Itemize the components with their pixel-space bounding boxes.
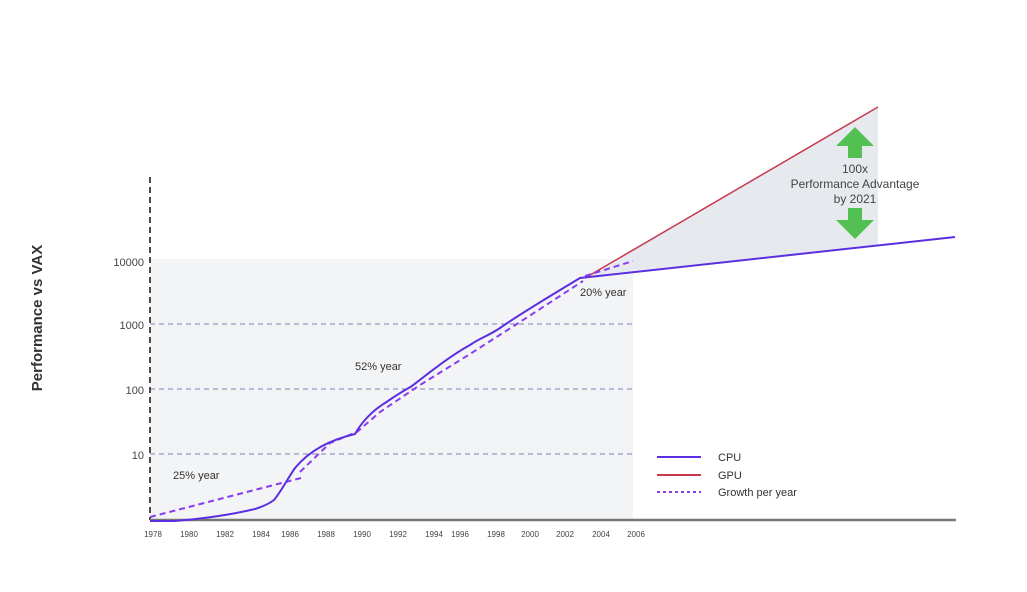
x axis labels: 1994: [425, 530, 443, 539]
annotation: 25% year: 25% year: [173, 470, 220, 482]
x axis labels: 1992: [389, 530, 407, 539]
y axis labels: 10: [132, 450, 144, 462]
x axis labels: 2002: [556, 530, 574, 539]
GPU line: [585, 107, 878, 278]
y axis labels: 100: [126, 385, 144, 397]
x axis labels: 1982: [216, 530, 234, 539]
x axis labels: [144, 530, 645, 539]
callout text: 100x: [842, 162, 868, 176]
callout text: by 2021: [834, 192, 877, 206]
y axis: [149, 177, 151, 520]
legend: CPU: [718, 452, 741, 464]
legend: Growth per year: [718, 487, 797, 499]
x axis labels: 1990: [353, 530, 371, 539]
callout text: [791, 162, 920, 206]
x axis labels: 2006: [627, 530, 645, 539]
gridlines: [150, 324, 633, 454]
growth per year dashed line: [150, 261, 633, 517]
CPU line: [150, 237, 955, 521]
callout text: Performance Advantage: [791, 177, 920, 191]
legend: GPU: [718, 470, 742, 482]
performance gap shaded area: [585, 107, 878, 278]
legend: [657, 452, 797, 499]
plot background panel: [150, 259, 633, 520]
y axis title: Performance vs VAX: [29, 245, 46, 391]
y axis labels: 10000: [113, 257, 144, 269]
icon: up arrow: [836, 127, 874, 158]
x axis labels: 1980: [180, 530, 198, 539]
icon: down arrow: [836, 208, 874, 239]
x axis labels: 1984: [252, 530, 270, 539]
x axis: [150, 519, 956, 521]
x axis labels: 1998: [487, 530, 505, 539]
x axis labels: 2000: [521, 530, 539, 539]
x axis labels: 1978: [144, 530, 162, 539]
y axis labels: 1000: [120, 320, 144, 332]
x axis labels: 1988: [317, 530, 335, 539]
annotation: 20% year: 20% year: [580, 287, 627, 299]
annotation: 52% year: 52% year: [355, 361, 402, 373]
y axis labels: [113, 257, 144, 462]
x axis labels: 2004: [592, 530, 610, 539]
x axis labels: 1996: [451, 530, 469, 539]
x axis labels: 1986: [281, 530, 299, 539]
